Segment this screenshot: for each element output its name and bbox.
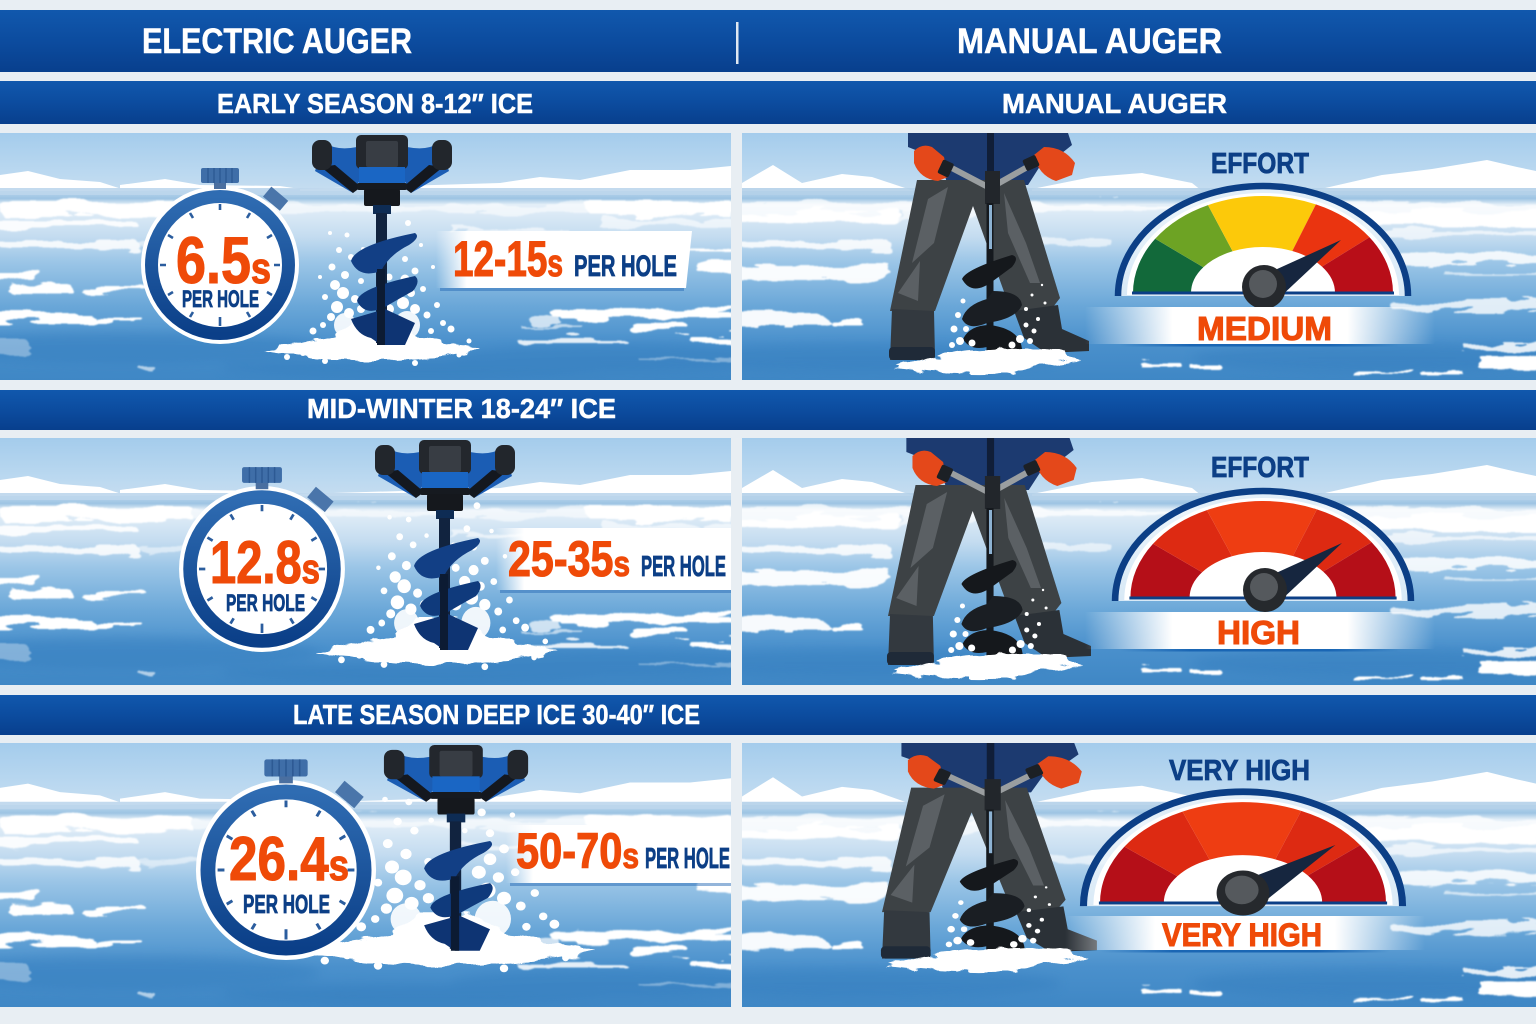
icon: stopwatch 26.4s bbox=[196, 759, 376, 960]
rating: very high: VERY HIGH bbox=[1162, 917, 1322, 953]
panel: mid-winter electric bbox=[0, 438, 790, 685]
icon: snow splash bbox=[263, 220, 481, 366]
stopwatch time: 6.5s bbox=[176, 223, 271, 297]
panel: late season electric bbox=[0, 743, 790, 1007]
stopwatch caption: PER HOLE bbox=[182, 286, 259, 313]
callout: manual time range: PER HOLE bbox=[641, 551, 726, 583]
icon: stopwatch 12.8s bbox=[179, 467, 345, 652]
heading: manual auger: MANUAL AUGER bbox=[957, 22, 1222, 61]
icon: person drilling bbox=[881, 743, 1097, 972]
very high label: VERY HIGH bbox=[1169, 755, 1310, 787]
stopwatch caption: PER HOLE bbox=[226, 590, 305, 617]
icon: stopwatch 6.5s bbox=[141, 168, 299, 344]
stopwatch caption: PER HOLE bbox=[243, 889, 330, 919]
callout: manual time range bbox=[506, 823, 731, 886]
gauge needle bbox=[1242, 240, 1341, 309]
gauge: medium effort bbox=[1118, 186, 1408, 296]
callout: manual time range bbox=[496, 528, 731, 593]
heading: manual auger sub: MANUAL AUGER bbox=[1002, 88, 1227, 119]
panel: early season manual bbox=[662, 133, 1536, 380]
panel: mid-winter manual bbox=[662, 438, 1536, 685]
callout: manual time range: 12-15s bbox=[453, 231, 563, 287]
icon: electric auger bbox=[312, 135, 452, 345]
callout: manual time range: PER HOLE bbox=[645, 843, 730, 875]
gauge: high effort bbox=[1115, 491, 1411, 601]
icon: snow splash bbox=[315, 502, 559, 670]
rating: high: HIGH bbox=[1217, 614, 1300, 651]
stopwatch time: 12.8s bbox=[210, 529, 320, 596]
icon: person drilling bbox=[889, 133, 1089, 374]
effort label: EFFORT bbox=[1211, 452, 1309, 484]
gauge needle bbox=[1217, 845, 1335, 915]
panel: early season electric bbox=[0, 133, 790, 380]
heading: mid-winter: MID-WINTER 18-24″ ICE bbox=[307, 393, 616, 424]
stopwatch time: 26.4s bbox=[229, 825, 349, 894]
icon: person drilling bbox=[887, 438, 1091, 679]
icon: electric auger bbox=[384, 745, 528, 951]
gauge: very high effort bbox=[1084, 792, 1402, 906]
rating: medium: MEDIUM bbox=[1197, 310, 1332, 347]
icon: electric auger bbox=[375, 440, 515, 650]
callout: manual time range: PER HOLE bbox=[574, 250, 677, 283]
callout: manual time range bbox=[436, 231, 692, 291]
icon: snow splash bbox=[291, 782, 596, 972]
heading: early season: EARLY SEASON 8-12″ ICE bbox=[217, 88, 533, 119]
section band: early season bbox=[0, 81, 1536, 124]
header bar: electric vs manual bbox=[0, 10, 1536, 72]
rating: very high bbox=[1065, 916, 1425, 953]
heading: electric auger: ELECTRIC AUGER bbox=[142, 22, 412, 61]
section band: mid-winter bbox=[0, 390, 1536, 430]
panel: late season manual bbox=[662, 743, 1536, 1007]
heading: late season: LATE SEASON DEEP ICE 30-40″ ICE bbox=[293, 699, 700, 730]
rating: high bbox=[1085, 612, 1435, 652]
callout: manual time range: 25-35s bbox=[508, 531, 630, 587]
gauge needle bbox=[1243, 543, 1342, 612]
rating: medium bbox=[1085, 307, 1435, 347]
callout: manual time range: 50-70s bbox=[516, 823, 639, 879]
section band: late season bbox=[0, 695, 1536, 735]
effort label: EFFORT bbox=[1211, 148, 1309, 180]
